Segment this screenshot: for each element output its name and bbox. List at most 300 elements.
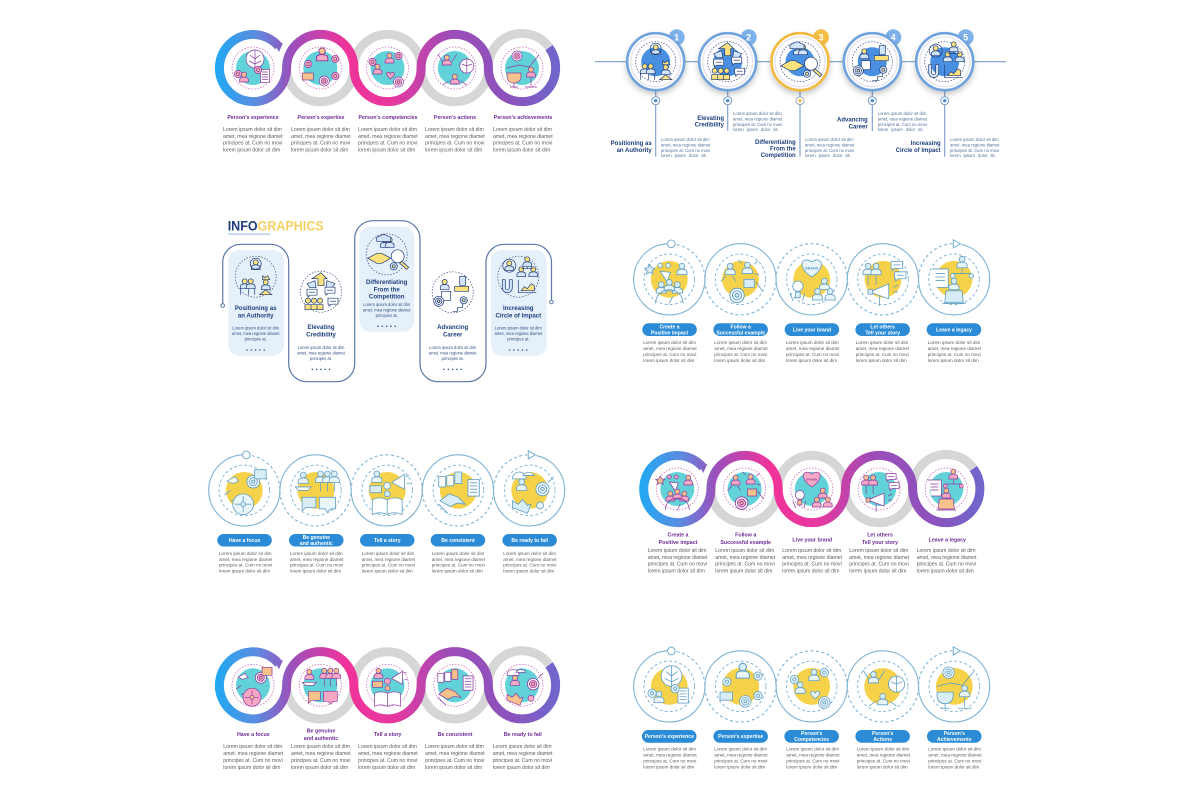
pills: Positive impact xyxy=(651,330,688,336)
step descriptions: lorem ipsum dolor sit dim xyxy=(786,765,838,770)
pills: Person's xyxy=(872,731,894,737)
step descriptions: amet, mea regione diamet xyxy=(849,555,910,561)
step titles: Tell a story xyxy=(374,732,402,738)
card descriptions: Lorem ipsum dolor sit dim xyxy=(495,326,542,331)
card descriptions: principes at. xyxy=(376,313,398,318)
step descriptions: Lorem ipsum dolor sit dim xyxy=(362,551,414,556)
dashed and solid rings xyxy=(634,647,990,722)
step descriptions xyxy=(223,127,553,154)
step descriptions: Lorem ipsum dolor sit dim xyxy=(223,127,282,133)
step descriptions: Lorem ipsum dolor sit dim xyxy=(786,340,839,345)
step descriptions: amet, mea regione diamet xyxy=(290,557,344,562)
step descriptions: amet, mea regione diamet xyxy=(786,346,840,351)
step descriptions: amet, mea regione diamet xyxy=(928,753,982,758)
step descriptions: amet, mea regione diamet xyxy=(733,116,783,121)
step descriptions: principes at. Cum no movi xyxy=(290,563,343,568)
step descriptions: amet, mea regione diamet xyxy=(358,134,418,140)
panel: numbered horizontal timeline xyxy=(595,29,1006,159)
step descriptions: Lorem ipsum dolor sit dim xyxy=(493,744,552,750)
pagination dots xyxy=(246,326,528,370)
step descriptions: lorem ipsum dolor sit dim xyxy=(362,569,413,574)
step descriptions: amet, mea regione diamet xyxy=(219,557,273,562)
panel: focus ribbon timeline xyxy=(219,651,556,771)
step descriptions: principes at. Cum no movi xyxy=(856,352,909,357)
icon: expertise xyxy=(299,47,341,89)
step descriptions: principes at. Cum no movi xyxy=(661,148,710,153)
step titles: Positioning as xyxy=(611,141,652,147)
step descriptions: lorem ipsum dolor sit dim xyxy=(857,765,908,770)
card descriptions xyxy=(232,302,543,361)
step descriptions: principes at. Cum no movi xyxy=(928,352,981,357)
pills: Leave a legacy xyxy=(936,327,972,333)
step descriptions xyxy=(219,551,557,574)
icon: live your brand xyxy=(786,254,837,305)
icon: live your brand: BRAND xyxy=(806,478,818,482)
ribbon with grey arcs xyxy=(219,651,556,719)
ribbon with grey arcs xyxy=(644,454,980,523)
icon: ready to fail xyxy=(501,664,543,706)
step 4 circle xyxy=(844,29,901,90)
step descriptions: Lorem ipsum dolor sit dim xyxy=(782,548,841,554)
step descriptions: Lorem ipsum dolor sit dim xyxy=(661,137,710,142)
step titles xyxy=(237,729,542,742)
step descriptions: lorem ipsum dolor sit dim xyxy=(493,765,550,771)
step descriptions: principes at. Cum no movi xyxy=(786,352,839,357)
step descriptions: principes at. Cum no movi xyxy=(432,563,485,568)
icon: genuine xyxy=(291,465,341,516)
step descriptions: principes at. Cum no movi xyxy=(362,563,415,568)
step 4 circle: 4 xyxy=(891,33,896,43)
step descriptions: principes at. Cum no movi xyxy=(643,759,696,764)
step descriptions: Lorem ipsum dolor sit dim xyxy=(714,747,767,752)
ribbon with grey arcs xyxy=(219,33,556,102)
step titles: Positive impact xyxy=(659,540,698,546)
icon: legacy xyxy=(925,468,967,510)
step titles: Be ready to fail xyxy=(504,732,542,738)
step titles xyxy=(227,115,552,121)
card titles: Circle of Impact xyxy=(495,312,541,320)
step 1 circle xyxy=(627,29,685,90)
step descriptions: lorem ipsum dolor sit. xyxy=(733,127,779,132)
panel: person's attributes ribbon timeline xyxy=(219,33,556,153)
step titles: Differentiating xyxy=(755,140,796,146)
pills xyxy=(642,323,981,336)
icon: story xyxy=(366,664,408,706)
step descriptions xyxy=(661,111,1000,158)
step titles: and authentic xyxy=(304,736,338,742)
step titles: Create a xyxy=(668,533,689,539)
icon: tell your story xyxy=(858,468,900,512)
step titles: Let others xyxy=(867,533,893,539)
step descriptions: Lorem ipsum dolor sit dim xyxy=(503,551,556,556)
icon: achievements xyxy=(929,661,980,712)
step descriptions: Lorem ipsum dolor sit dim xyxy=(950,137,999,142)
icon: tell your story xyxy=(858,254,908,306)
icon: focus xyxy=(219,465,270,516)
step descriptions: lorem ipsum dolor sit dim xyxy=(425,765,482,771)
step descriptions: Lorem ipsum dolor sit dim xyxy=(857,747,909,752)
step descriptions: principes at. Cum no movi xyxy=(878,122,927,127)
stem nodes xyxy=(652,97,949,105)
card descriptions: amet, mea regione diamet xyxy=(297,351,346,356)
step descriptions: lorem ipsum dolor sit. xyxy=(950,153,996,158)
icon: focus xyxy=(232,664,274,706)
pills: Achievements xyxy=(937,737,972,743)
step descriptions: Lorem ipsum dolor sit dim xyxy=(223,744,282,750)
step descriptions: lorem ipsum dolor sit dim xyxy=(928,358,979,363)
pills: Be consistent xyxy=(441,538,475,544)
step descriptions: amet, mea regione diamet xyxy=(856,346,910,351)
step descriptions: Lorem ipsum dolor sit dim xyxy=(715,548,774,554)
step descriptions: Lorem ipsum dolor sit dim xyxy=(643,747,696,752)
step descriptions: amet, mea regione diamet xyxy=(661,142,711,147)
step titles: Person's competencies xyxy=(359,115,418,121)
snake outline xyxy=(223,221,551,382)
step descriptions: amet, mea regione diamet xyxy=(805,142,855,147)
step descriptions: lorem ipsum dolor sit. xyxy=(661,153,707,158)
pills: Be genuine xyxy=(303,535,330,541)
step descriptions: principes at. Cum no movi xyxy=(714,759,767,764)
pills: Person's xyxy=(801,731,823,737)
step descriptions: Lorem ipsum dolor sit dim xyxy=(714,340,767,345)
step descriptions xyxy=(648,548,977,574)
step descriptions: Lorem ipsum dolor sit dim xyxy=(425,127,484,133)
step titles: Credibility xyxy=(695,122,725,128)
step descriptions: principes at. Cum no movi xyxy=(917,562,976,568)
card titles: an Authority xyxy=(238,312,274,320)
step descriptions: lorem ipsum dolor sit dim xyxy=(425,148,482,154)
step descriptions: lorem ipsum dolor sit. xyxy=(805,153,851,158)
step descriptions: Lorem ipsum dolor sit dim xyxy=(291,744,350,750)
step titles: Follow a xyxy=(735,533,756,539)
step descriptions: principes at. Cum no movi xyxy=(928,759,981,764)
card descriptions: principes at. xyxy=(442,356,464,361)
icon: competencies xyxy=(366,47,408,89)
step titles: Advancing xyxy=(837,117,868,123)
step descriptions xyxy=(643,340,982,363)
step descriptions: principes at. Cum no movi xyxy=(715,562,775,568)
step descriptions: principes at. Cum no movi xyxy=(425,141,484,147)
step descriptions: amet, mea regione diamet xyxy=(223,134,283,140)
step descriptions: amet, mea regione diamet xyxy=(786,753,840,758)
card titles: From the xyxy=(374,286,400,294)
step descriptions: amet, mea regione diamet xyxy=(714,346,768,351)
icon: experience xyxy=(644,661,695,712)
step descriptions: amet, mea regione diamet xyxy=(928,346,982,351)
icon: credibility xyxy=(300,271,342,312)
step titles xyxy=(611,116,941,159)
icon: live your brand: BRAND xyxy=(805,267,819,271)
step titles: Tell your story xyxy=(862,540,898,546)
step descriptions: Lorem ipsum dolor sit dim xyxy=(425,744,484,750)
step descriptions: lorem ipsum dolor sit. xyxy=(878,127,923,132)
step descriptions: principes at. Cum no movi xyxy=(849,562,909,568)
step descriptions: lorem ipsum dolor sit dim xyxy=(856,358,907,363)
pills: Competencies xyxy=(794,737,829,743)
step titles: Circle of Impact xyxy=(896,148,941,154)
pills: Actions xyxy=(873,737,892,743)
step descriptions: lorem ipsum dolor sit dim xyxy=(917,569,974,575)
step descriptions: amet, mea regione diamet xyxy=(425,751,485,757)
card descriptions: principes at. xyxy=(245,337,267,342)
step descriptions: principes at. Cum no movi xyxy=(291,141,350,147)
panel: personal brand ribbon timeline xyxy=(644,454,980,574)
step descriptions: Lorem ipsum dolor sit dim xyxy=(805,137,854,142)
pills: Follow a xyxy=(731,324,751,330)
step titles: Competition xyxy=(761,153,796,159)
step descriptions: amet, mea regione diamet xyxy=(782,555,843,561)
card descriptions: principes at. xyxy=(310,356,332,361)
icon: circle of impact xyxy=(498,256,539,297)
step descriptions: principes at. Cum no movi xyxy=(223,141,282,147)
step 3 circle: 3 xyxy=(818,33,824,43)
pills: Person's experience xyxy=(645,734,694,740)
step descriptions: principes at. Cum no movi xyxy=(714,352,767,357)
step descriptions: amet, mea regione diamet xyxy=(643,753,697,758)
step descriptions: lorem ipsum dolor sit dim xyxy=(223,765,280,771)
card descriptions: amet, mea regione diamet xyxy=(495,331,543,336)
dashed and solid rings xyxy=(634,240,990,315)
step descriptions: Lorem ipsum dolor sit dim xyxy=(493,127,552,133)
step 1 circle: 1 xyxy=(674,33,679,43)
step titles xyxy=(659,533,966,546)
card titles: Advancing xyxy=(437,324,469,331)
step descriptions: Lorem ipsum dolor sit dim xyxy=(358,127,417,133)
timeline axis and stems xyxy=(595,62,1006,157)
step descriptions: amet, mea regione diamet xyxy=(917,555,977,561)
step descriptions: principes at. Cum no movi xyxy=(358,141,417,147)
card descriptions: amet, mea regione diamet xyxy=(429,351,477,356)
step descriptions: amet, mea regione diamet xyxy=(857,753,911,758)
icon: story xyxy=(362,465,412,516)
pills: Create a xyxy=(659,324,680,330)
icon: ready to fail xyxy=(504,465,555,516)
step descriptions: principes at. Cum no movi xyxy=(805,148,854,153)
card titles: Credibility xyxy=(306,332,337,338)
step descriptions: principes at. Cum no movi xyxy=(493,141,552,147)
step descriptions: principes at. Cum no movi xyxy=(782,562,842,568)
icon: achievements xyxy=(501,47,543,89)
step descriptions: Lorem ipsum dolor sit dim xyxy=(786,747,839,752)
step descriptions: Lorem ipsum dolor sit dim xyxy=(291,127,350,133)
step descriptions: Lorem ipsum dolor sit dim xyxy=(648,548,707,554)
step descriptions: amet, mea regione diamet xyxy=(432,557,486,562)
step titles: Increasing xyxy=(911,141,941,147)
step descriptions: amet, mea regione diamet xyxy=(493,751,553,757)
step descriptions: lorem ipsum dolor sit dim xyxy=(714,358,766,363)
step descriptions xyxy=(643,747,982,770)
step titles: From the xyxy=(770,146,796,152)
step descriptions: lorem ipsum dolor sit dim xyxy=(786,358,837,363)
pills: Tell your story xyxy=(865,330,900,336)
step descriptions: lorem ipsum dolor sit dim xyxy=(643,765,695,770)
step descriptions: principes at. Cum no movi xyxy=(786,759,839,764)
step titles: Career xyxy=(849,124,868,130)
step descriptions: principes at. Cum no movi xyxy=(503,563,556,568)
step descriptions: Lorem ipsum dolor sit dim xyxy=(917,548,976,554)
pills: Tell a story xyxy=(374,538,401,544)
card titles: Competition xyxy=(369,294,405,300)
pills: Live your brand xyxy=(793,327,831,333)
step descriptions: lorem ipsum dolor sit dim xyxy=(223,148,280,154)
step descriptions: principes at. Cum no movi xyxy=(291,758,350,764)
step descriptions: Lorem ipsum dolor sit dim xyxy=(878,111,927,116)
icon: successful example xyxy=(715,254,766,305)
step descriptions: principes at. Cum no movi xyxy=(950,148,999,153)
pills: Person's expertise xyxy=(718,734,763,740)
icon: competencies xyxy=(786,661,837,712)
step descriptions: principes at. Cum no movi xyxy=(425,758,484,764)
step descriptions: principes at. Cum no movi xyxy=(857,759,910,764)
card titles xyxy=(235,279,541,338)
snake end nodes xyxy=(221,300,553,307)
step descriptions: amet, mea regione diamet xyxy=(291,751,351,757)
icon: legacy xyxy=(929,254,979,305)
step descriptions: lorem ipsum dolor sit dim xyxy=(849,569,906,575)
step descriptions: principes at. Cum no movi xyxy=(219,563,272,568)
step titles: an Authority xyxy=(617,148,652,154)
step descriptions: Lorem ipsum dolor sit dim xyxy=(856,340,908,345)
step descriptions: amet, mea regione diamet xyxy=(715,555,776,561)
step titles: Person's actions xyxy=(434,115,476,121)
step titles: Elevating xyxy=(697,116,724,122)
icon: genuine xyxy=(299,664,341,706)
step descriptions: Lorem ipsum dolor sit dim xyxy=(219,551,272,556)
step descriptions: Lorem ipsum dolor sit dim xyxy=(733,111,782,116)
step descriptions: amet, mea regione diamet xyxy=(643,346,697,351)
step descriptions: lorem ipsum dolor sit dim xyxy=(358,148,415,154)
card descriptions: Lorem ipsum dolor sit dim xyxy=(298,345,345,350)
icon: authority xyxy=(235,256,276,297)
icon: consistent xyxy=(433,465,484,516)
step descriptions: principes at. Cum no movi xyxy=(358,758,417,764)
step descriptions: Lorem ipsum dolor sit dim xyxy=(928,747,981,752)
step descriptions: lorem ipsum dolor sit dim xyxy=(714,765,766,770)
step titles: Successful example xyxy=(720,540,771,546)
pills xyxy=(217,534,557,547)
step descriptions: amet, mea regione diamet xyxy=(648,555,708,561)
step descriptions xyxy=(223,744,553,771)
step descriptions: lorem ipsum dolor sit dim xyxy=(358,765,415,771)
card descriptions: Lorem ipsum dolor sit dim xyxy=(429,345,477,350)
step descriptions: lorem ipsum dolor sit dim xyxy=(432,569,483,574)
panel: personal brand pill timeline xyxy=(634,240,990,363)
icon: successful example xyxy=(724,468,766,510)
step descriptions: amet, mea regione diamet xyxy=(714,753,768,758)
step titles: Be genuine xyxy=(307,729,335,735)
step descriptions: amet, mea regione diamet xyxy=(503,557,557,562)
step descriptions: Lorem ipsum dolor sit dim xyxy=(432,551,484,556)
step descriptions: amet, mea regione diamet xyxy=(878,116,928,121)
step descriptions: principes at. Cum no movi xyxy=(643,352,696,357)
card descriptions: Lorem ipsum dolor sit dim xyxy=(232,326,280,331)
step 2 circle: 2 xyxy=(746,33,751,43)
step descriptions: amet, mea regione diamet xyxy=(358,751,418,757)
step descriptions: lorem ipsum dolor sit dim xyxy=(219,569,270,574)
step descriptions: amet, mea regione diamet xyxy=(425,134,485,140)
step descriptions: lorem ipsum dolor sit dim xyxy=(290,569,341,574)
step titles: Leave a legacy xyxy=(929,538,966,544)
panel: focus pill timeline xyxy=(209,451,565,574)
pills xyxy=(642,730,982,743)
step 3 circle xyxy=(772,29,829,90)
pills: Successful example xyxy=(716,330,765,336)
icon: expertise xyxy=(715,661,766,712)
step descriptions: principes at. Cum no movi xyxy=(648,562,707,568)
step descriptions: lorem ipsum dolor sit dim xyxy=(503,569,555,574)
pills: Let others xyxy=(870,324,895,330)
step descriptions: lorem ipsum dolor sit dim xyxy=(291,148,348,154)
step titles: Be consistent xyxy=(438,732,473,738)
step titles: Live your brand xyxy=(792,538,832,544)
step descriptions: lorem ipsum dolor sit dim xyxy=(291,765,348,771)
icon: career xyxy=(432,272,473,313)
card titles: Career xyxy=(443,332,463,338)
step 5 circle: 5 xyxy=(963,33,968,43)
icon: actions xyxy=(857,661,908,712)
step titles: Person's experience xyxy=(227,115,279,121)
step descriptions: amet, mea regione diamet xyxy=(223,751,284,757)
step descriptions: Lorem ipsum dolor sit dim xyxy=(928,340,980,345)
card descriptions: amet, mea regione diamet xyxy=(363,308,411,313)
step descriptions: principes at. Cum no movi xyxy=(223,758,283,764)
step 2 circle xyxy=(699,29,757,90)
card descriptions: principes at. xyxy=(507,337,529,342)
step descriptions: Lorem ipsum dolor sit dim xyxy=(849,548,908,554)
step descriptions: lorem ipsum dolor sit dim xyxy=(493,148,550,154)
pills: Person's xyxy=(944,731,965,737)
card titles: Elevating xyxy=(307,324,335,331)
step descriptions: Lorem ipsum dolor sit dim xyxy=(290,551,343,556)
card titles: Differentiating xyxy=(366,279,408,286)
step descriptions: amet, mea regione diamet xyxy=(362,557,416,562)
card descriptions: Lorem ipsum dolor sit dim xyxy=(363,302,411,307)
card titles: Increasing xyxy=(503,305,534,312)
icon: live your brand xyxy=(791,468,833,510)
step descriptions: lorem ipsum dolor sit dim xyxy=(648,569,705,575)
step descriptions: amet, mea regione diamet xyxy=(291,134,351,140)
pills: Be ready to fail xyxy=(511,538,549,544)
step titles: Person's expertise xyxy=(298,115,344,121)
step descriptions: Lorem ipsum dolor sit dim xyxy=(358,744,417,750)
pills: and authentic xyxy=(300,541,333,547)
icon: actions xyxy=(434,47,476,89)
icon: positive impact xyxy=(656,468,698,510)
icon: differentiating xyxy=(366,234,409,275)
pills: Have a focus xyxy=(229,538,260,544)
card backgrounds xyxy=(228,227,547,356)
step descriptions: lorem ipsum dolor sit dim xyxy=(782,569,839,575)
heading: INFOGRAPHICS: INFOGRAPHICS xyxy=(228,219,324,234)
icon: positive impact xyxy=(644,254,695,305)
step titles: Have a focus xyxy=(237,732,270,738)
step descriptions: lorem ipsum dolor sit dim xyxy=(715,569,772,575)
step descriptions: Lorem ipsum dolor sit dim xyxy=(643,340,696,345)
step 5 circle xyxy=(916,29,974,90)
step descriptions: amet, mea regione diamet xyxy=(950,142,1000,147)
card descriptions: amet, mea regione diamet xyxy=(232,331,280,336)
step descriptions: amet, mea regione diamet xyxy=(493,134,553,140)
icon: experience xyxy=(232,47,274,89)
step descriptions: principes at. Cum no movi xyxy=(493,758,552,764)
panel: card snake infographic xyxy=(221,219,553,382)
dashed and solid rings xyxy=(209,451,565,526)
step descriptions: lorem ipsum dolor sit dim xyxy=(643,358,695,363)
step descriptions: principes at. Cum no movi xyxy=(733,122,782,127)
icon: consistent xyxy=(434,664,476,706)
step titles: Person's achievements xyxy=(494,115,552,121)
panel: person's attributes pill timeline xyxy=(634,647,990,770)
